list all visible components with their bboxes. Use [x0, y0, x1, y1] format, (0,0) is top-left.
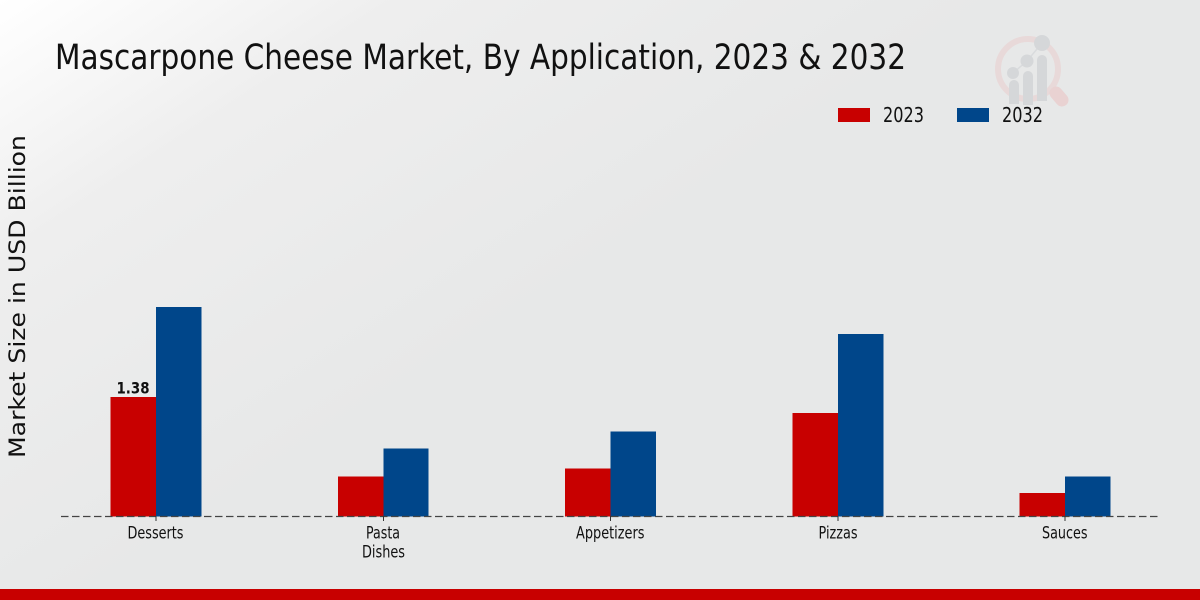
icon: watermark logo	[998, 35, 1062, 105]
bars: Desserts	[110, 307, 202, 516]
category labels: Appetizers	[576, 524, 644, 542]
category labels: Dishes	[362, 542, 405, 562]
y-axis label: Market Size in USD Billion	[5, 135, 31, 458]
legend	[838, 103, 1043, 127]
legend: 2023: 2023	[883, 103, 924, 127]
bars: Pizzas	[792, 334, 884, 516]
category labels: Pizzas	[818, 524, 858, 542]
legend: 2032: 2032	[1002, 103, 1043, 127]
category labels: Pasta	[366, 524, 400, 542]
title: Mascarpone Cheese Market, By Application, 2023 & 2032	[55, 38, 906, 78]
bars: Appetizers	[565, 432, 656, 516]
category labels: Sauces	[1042, 524, 1088, 542]
legend: 2032	[957, 103, 1043, 127]
bar chart	[61, 307, 1160, 562]
category labels: Desserts	[128, 524, 184, 542]
footer bar	[0, 589, 1200, 600]
category labels	[128, 524, 1088, 562]
legend: 2023	[838, 103, 924, 127]
bars: Pasta Dishes	[338, 448, 428, 516]
baseline	[61, 516, 1160, 518]
bars: Sauces	[1020, 476, 1110, 516]
data label: 1.38	[116, 378, 150, 398]
